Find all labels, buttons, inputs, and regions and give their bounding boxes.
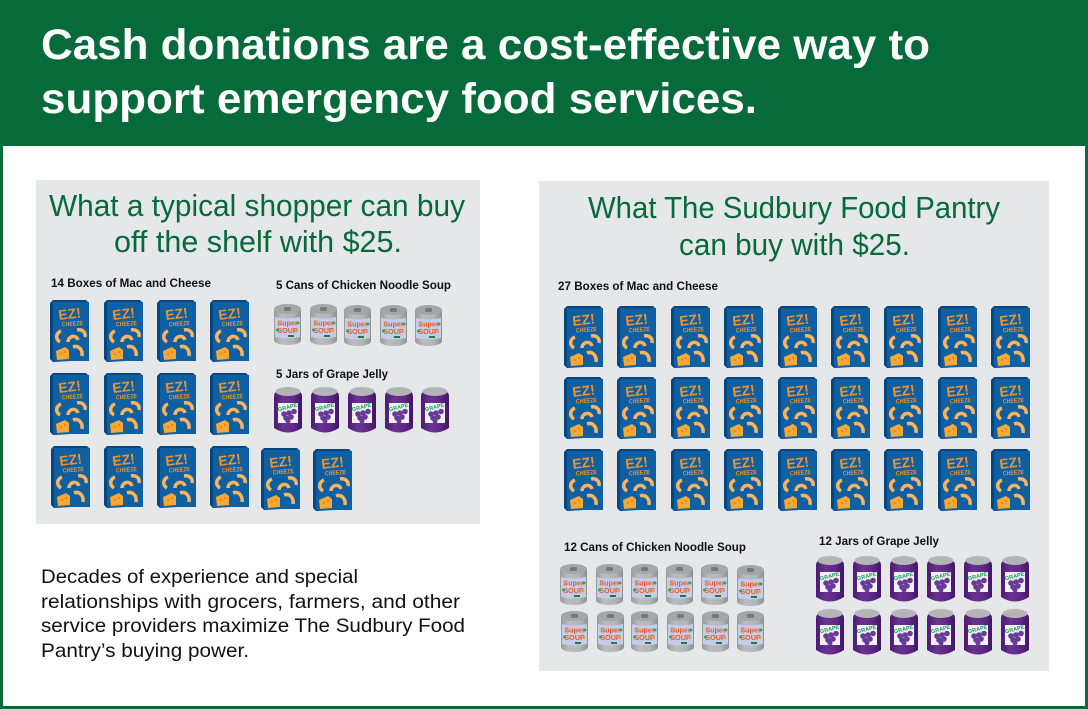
text block: buying power: Decades of experience and special: [41, 566, 358, 588]
text block: buying power: [41, 566, 465, 662]
icons: 12 jars of jelly: [816, 556, 1029, 654]
panel: typical shopper: [36, 180, 480, 524]
icons: 12 cans of soup: [560, 564, 764, 652]
label: 27 boxes: 27 Boxes of Mac and Cheese: [558, 281, 718, 293]
label: 5 cans: 5 Cans of Chicken Noodle Soup: [276, 280, 451, 292]
title: [41, 21, 930, 123]
icons: 14 boxes of mac and cheese: [50, 300, 352, 511]
heading: typical shopper: off the shelf with $25.: [114, 224, 402, 259]
label: 12 jars: 12 Jars of Grape Jelly: [819, 536, 940, 548]
panel: Sudbury Food Pantry: [539, 181, 1049, 671]
label: 5 jars: 5 Jars of Grape Jelly: [276, 369, 389, 381]
icons: 5 cans of soup: [274, 304, 442, 346]
title: Cash donations are a cost-effective way to: [41, 21, 930, 69]
text block: buying power: service providers maximize The Sudbury Food: [41, 615, 465, 637]
title: support emergency food services.: [41, 75, 757, 123]
text block: buying power: Pantry’s buying power.: [41, 640, 249, 662]
heading: typical shopper: What a typical shopper can buy: [49, 188, 465, 223]
heading: typical shopper: [49, 188, 465, 259]
icons: 5 jars of jelly: [274, 387, 449, 432]
heading: Sudbury Food Pantry: can buy with $25.: [679, 227, 910, 262]
text block: buying power: relationships with grocers, farmers, and other: [41, 591, 461, 613]
label: 12 cans: 12 Cans of Chicken Noodle Soup: [564, 542, 746, 554]
icons: 27 boxes of mac and cheese: [564, 306, 1030, 511]
heading: Sudbury Food Pantry: What The Sudbury Food Pantry: [588, 190, 1000, 225]
label: 14 boxes: 14 Boxes of Mac and Cheese: [51, 278, 211, 290]
heading: Sudbury Food Pantry: [588, 190, 1000, 262]
